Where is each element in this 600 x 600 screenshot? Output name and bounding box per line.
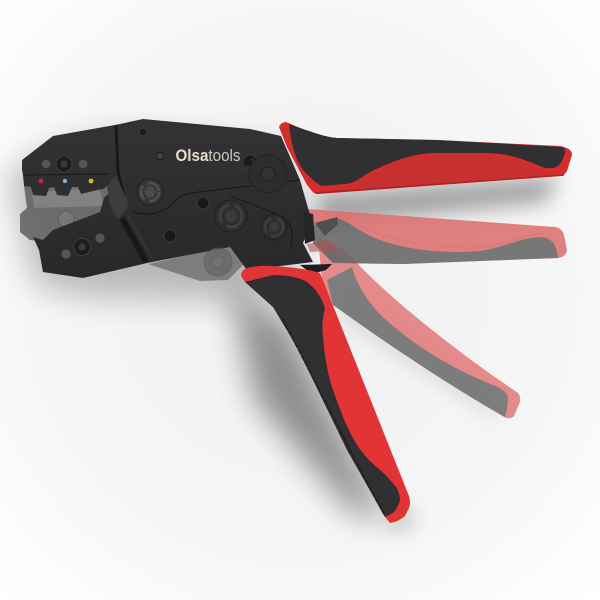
- lower handle black grip: [245, 275, 400, 517]
- vertical seam: [116, 125, 124, 196]
- fasteners upper jaw: [42, 156, 87, 172]
- ratchet pawl and red ghost glimpses: [300, 212, 340, 274]
- ghost handle grip, middle: [313, 218, 558, 264]
- pivot: centre: [215, 200, 247, 232]
- link plate outline: [230, 196, 292, 250]
- ghost lower jaw, moving: [20, 180, 110, 242]
- small body rivets: [139, 128, 257, 242]
- logo: Olsatools: [176, 147, 240, 165]
- plate overlap line: [132, 180, 300, 214]
- main plate: [22, 119, 313, 278]
- ghost handle: lowest position: [318, 238, 520, 418]
- ghost handle: middle position: [308, 209, 567, 264]
- lever link under the body: [148, 246, 246, 281]
- upper handle lower edge: [316, 175, 564, 193]
- upper handle black grip: [289, 124, 565, 186]
- lower handle red overmold: [241, 266, 410, 523]
- jaw hinge block: [107, 175, 129, 220]
- drop shadows: [8, 135, 560, 532]
- lower handle shaded edge: [282, 318, 384, 514]
- upper handle crest: [352, 155, 548, 188]
- ghost lever pivot: [204, 248, 232, 276]
- ghost pin: [58, 211, 74, 227]
- colour dots: wire gauge markers: [39, 179, 93, 183]
- ghost jaw teeth: [32, 188, 103, 208]
- tool body: [22, 119, 313, 278]
- ghost handle grip, lowest: [327, 267, 508, 417]
- lower handle: [241, 266, 410, 523]
- fasteners lower jaw: [61, 233, 105, 259]
- upper handle: [279, 122, 572, 194]
- upper handle red overmold: [279, 122, 572, 194]
- lower diagonal seam: [122, 218, 146, 262]
- pivot: left: [137, 179, 163, 205]
- ratchet gear: [247, 153, 289, 195]
- pivot: right: [261, 214, 287, 240]
- upper jaw groove: [23, 174, 110, 175]
- ghost handle highlight band: [345, 219, 545, 248]
